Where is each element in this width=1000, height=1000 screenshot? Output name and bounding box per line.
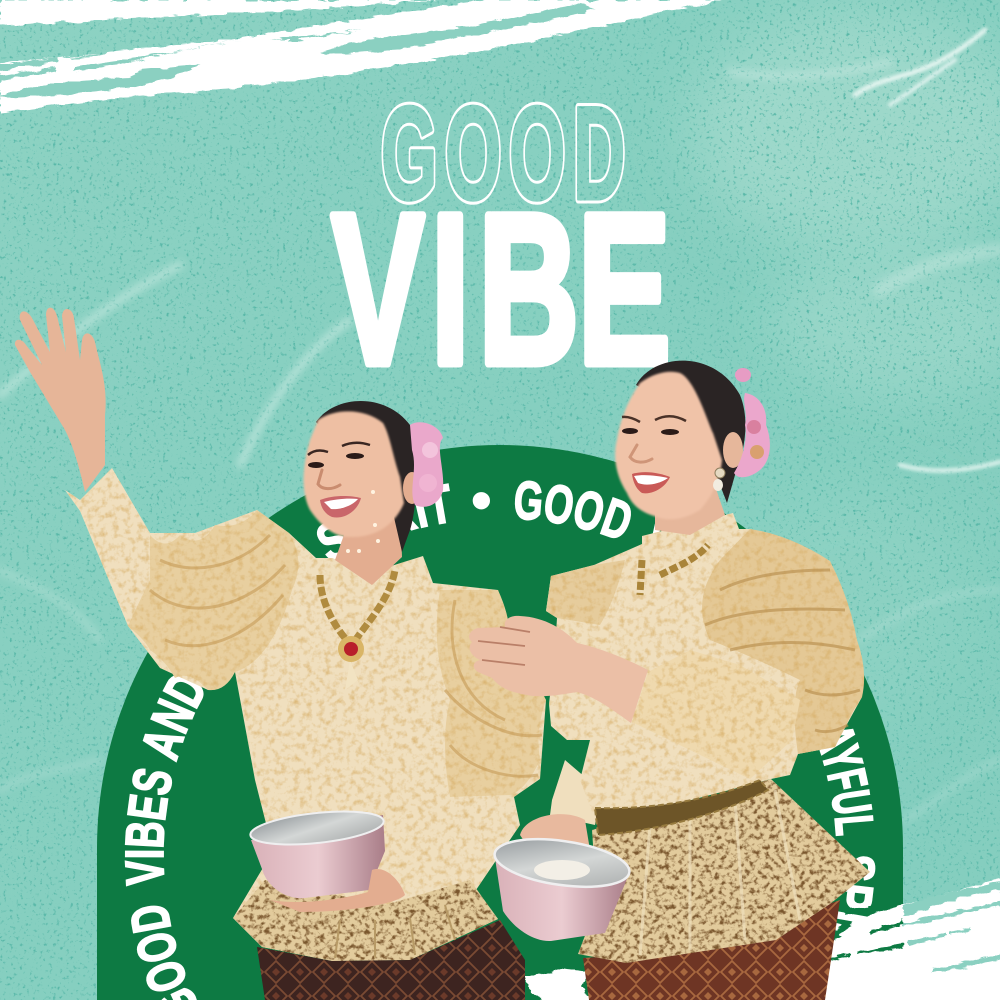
circular slogan text: AND [142,676,204,763]
circular slogan text: VIBES [652,524,660,534]
lace blouse [546,513,862,825]
face [304,411,404,537]
patterned sarong [583,900,840,1000]
ear [723,432,743,468]
lace peplum [578,779,870,963]
hands holding bowl [270,869,405,912]
left shoulder ruffle [546,560,625,625]
ear [403,472,421,504]
eyes and brows [308,443,370,468]
far arm and hand [520,760,600,850]
circular slogan text: PLAYFUL [819,728,874,836]
title: VIBE solid: V [332,171,424,409]
shoulder ruffles [702,529,864,754]
circular slogan text: VIBES [124,768,172,886]
lace blouse [65,468,546,961]
green arch [97,445,903,1000]
nose [318,470,340,489]
woman on the right [469,361,870,1000]
hair [316,401,416,552]
patterned sarong [257,920,525,1000]
circular slogan text: GOOD [514,480,631,538]
earring [713,468,725,491]
woman on the left [15,308,546,1000]
lace peplum [233,880,498,961]
circular slogan text: • [472,492,490,510]
outstretched hand and arm [469,616,648,723]
circular slogan text: SPIRIT [316,483,450,560]
circular slogan text [124,480,876,1000]
hair [636,361,745,503]
circular slogan text: AND [732,587,831,691]
circular slogan text: PLAYFUL [175,532,325,682]
flowers [734,368,770,477]
neck [335,500,402,585]
title: VIBE solid: E [578,171,671,409]
silver bowl with water [492,832,632,941]
nose [630,445,652,462]
eyes and brows [622,416,686,435]
title: VIBE solid: B [478,171,579,409]
smile [320,496,361,518]
flowers [410,422,443,507]
sleeve [632,650,800,779]
title: GOOD outlined: GOOD [381,80,633,228]
brush stroke: bottom right [525,878,1000,1000]
shoulder ruffles [128,510,298,690]
raised hand and forearm [15,308,106,492]
gold necklace [640,545,708,595]
title: VIBE solid: I [431,171,470,409]
smile [632,472,670,493]
water drops [346,490,380,553]
face [615,372,722,519]
gold necklace with red jewel [320,570,395,690]
silver bowl [249,806,385,898]
side ruffles [437,590,546,797]
brush stroke: top left [0,0,722,112]
gold belt [595,780,768,835]
neck [655,480,725,535]
